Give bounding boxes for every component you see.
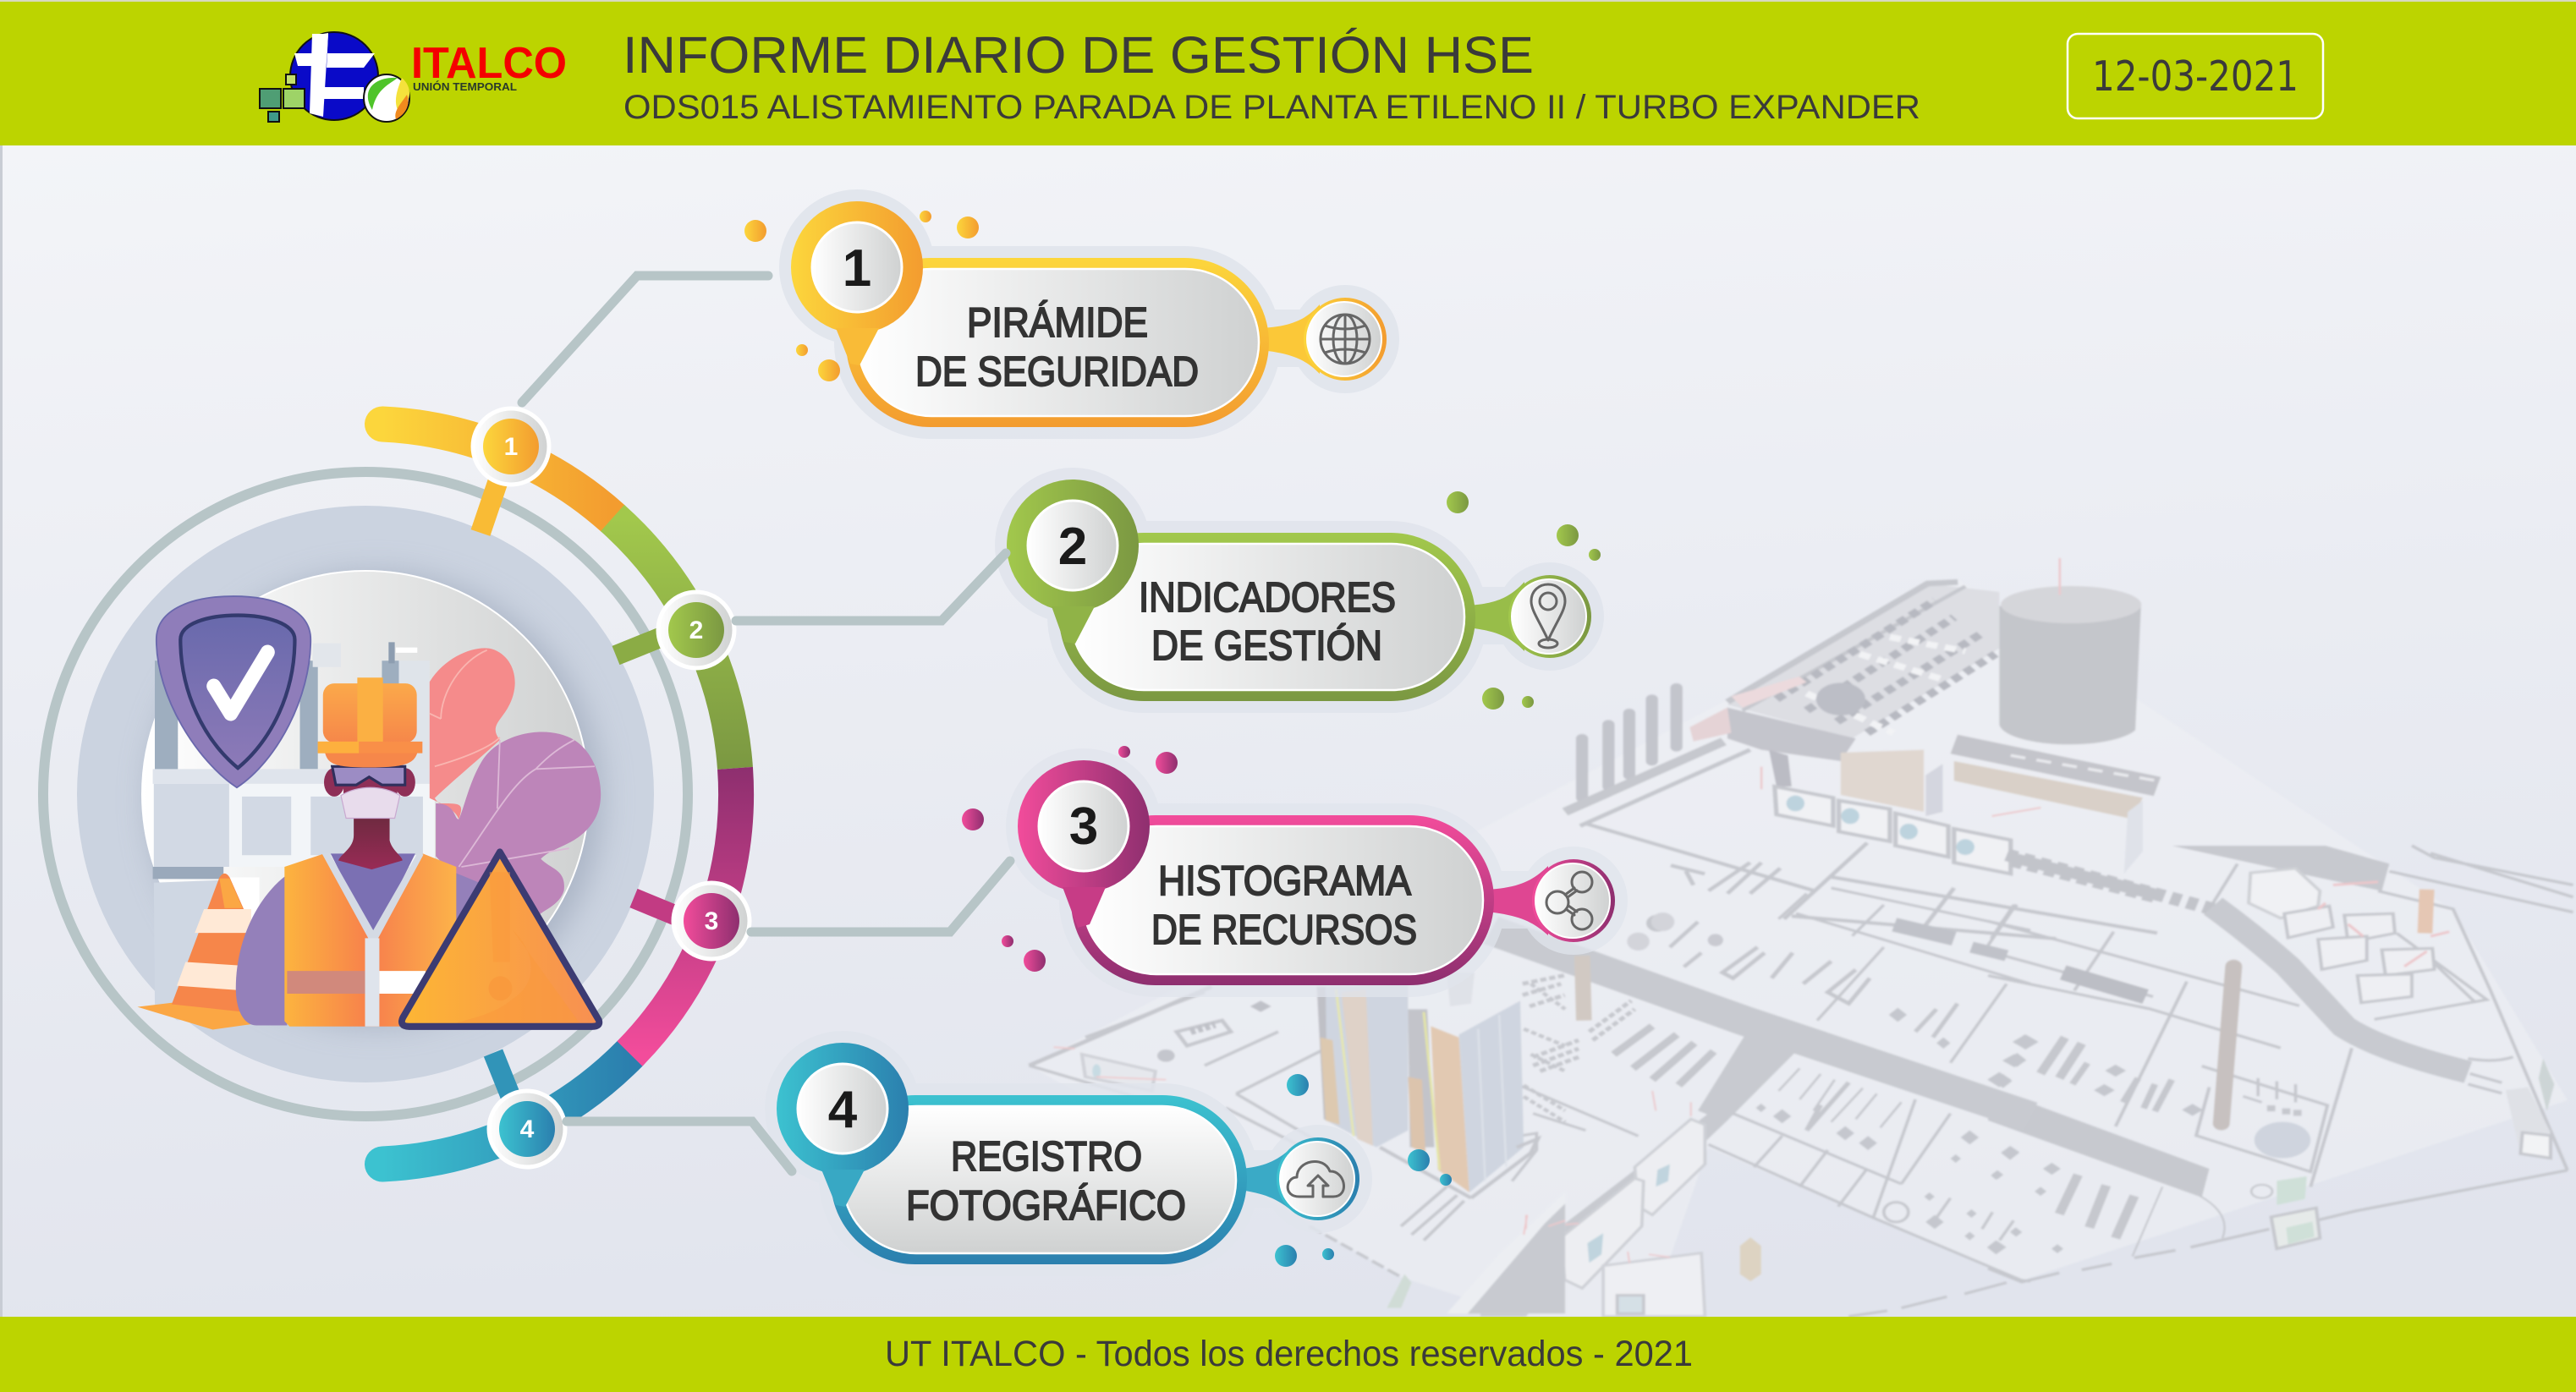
- node 2: 2: [689, 617, 703, 644]
- background plant drawing: [1030, 558, 2573, 1317]
- label: [906, 1134, 1186, 1229]
- disc shadow: [149, 573, 602, 1026]
- icon: share: [1532, 859, 1615, 942]
- worker: [236, 677, 492, 1027]
- label: [915, 300, 1199, 395]
- node 4: 4: [520, 1115, 535, 1143]
- number: 2: [1058, 518, 1087, 576]
- date box: [2068, 34, 2323, 118]
- plant: tank and process block: [1565, 558, 2157, 939]
- panel: histograma de recursos: [962, 746, 1616, 985]
- number: [1039, 781, 1129, 871]
- icon: map pin: [1508, 575, 1591, 658]
- node 3: [673, 883, 750, 959]
- cone: [137, 874, 261, 1030]
- node 2: [658, 592, 734, 668]
- title: INFORME DIARIO DE GESTIÓN HSE: [623, 26, 1534, 84]
- dots: [1275, 1074, 1452, 1267]
- label: [1151, 858, 1417, 953]
- connector lines: [522, 276, 1010, 1171]
- warning triangle: [402, 852, 599, 1027]
- icon: cloud upload: [1277, 1137, 1359, 1220]
- dots: [962, 746, 1178, 972]
- label: [1139, 575, 1396, 669]
- footer text: UT ITALCO - Todos los derechos reservados - 2021: [885, 1334, 1693, 1374]
- number: 1: [843, 239, 871, 298]
- number: 4: [828, 1081, 858, 1139]
- header band: [0, 0, 2576, 145]
- label: HISTOGRAMA: [1158, 858, 1411, 904]
- plant: central section: [1480, 888, 2032, 1317]
- outer grey ring: [43, 472, 688, 1116]
- inner disc: [142, 571, 589, 1017]
- label: FOTOGRÁFICO: [906, 1183, 1186, 1229]
- label: PIRÁMIDE: [967, 300, 1148, 346]
- segmented arc: [382, 425, 736, 1164]
- node 4: [489, 1091, 565, 1167]
- subtitle: ODS015 ALISTAMIENTO PARADA DE PLANTA ETILENO II / TURBO EXPANDER: [623, 89, 1920, 126]
- dots: [1447, 491, 1601, 710]
- shield: [157, 596, 310, 787]
- logo subtitle: UNIÓN TEMPORAL: [413, 80, 517, 93]
- panel: indicadores de gestion: [1007, 480, 1601, 710]
- label: INDICADORES: [1139, 575, 1396, 621]
- pale disc: [77, 506, 654, 1082]
- worker illustration: [137, 596, 601, 1030]
- node 3: 3: [705, 907, 718, 935]
- dots: [744, 211, 979, 381]
- footer band: [0, 1317, 2576, 1392]
- label: DE SEGURIDAD: [915, 349, 1199, 395]
- building: [153, 642, 440, 1020]
- logo wordmark: ITALCO: [411, 39, 567, 88]
- number: 3: [1069, 797, 1098, 856]
- number: [798, 1064, 887, 1154]
- label: DE RECURSOS: [1151, 907, 1417, 953]
- number: [1028, 501, 1118, 590]
- icon: globe: [1304, 298, 1387, 381]
- label: DE GESTIÓN: [1151, 623, 1382, 669]
- label: REGISTRO: [951, 1134, 1142, 1180]
- date box: 12-03-2021: [2092, 52, 2299, 101]
- logo: [260, 32, 409, 122]
- plant: west section and towers: [1030, 973, 1565, 1313]
- node 1: [473, 408, 549, 485]
- purple leaf: [436, 732, 601, 920]
- spokes: [481, 478, 677, 1104]
- node 1: 1: [504, 433, 518, 461]
- plant: east section: [1987, 846, 2573, 1282]
- panel: registro fotografico: [777, 1043, 1452, 1267]
- circular diagram: [43, 408, 750, 1167]
- coral leaf: [430, 648, 515, 819]
- panel: piramide de seguridad: [744, 201, 1387, 427]
- number: [812, 222, 902, 312]
